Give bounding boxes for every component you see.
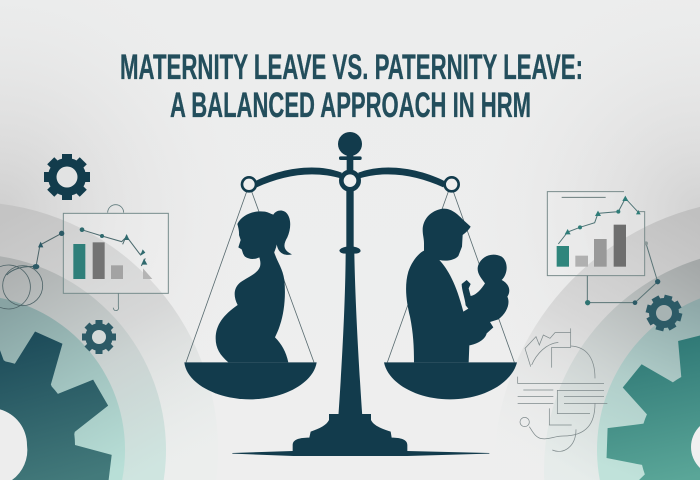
left chart panel — [0, 205, 168, 311]
left concentric circles — [0, 204, 218, 480]
beam rings — [242, 172, 459, 191]
base — [232, 414, 489, 456]
scale strings — [186, 192, 514, 362]
chart frame — [547, 192, 645, 276]
trend line — [80, 227, 147, 266]
hanger loop — [108, 205, 124, 311]
network connector — [7, 231, 64, 275]
right chart panel — [518, 192, 660, 451]
father holding baby silhouette — [406, 209, 509, 362]
small gear top left — [44, 154, 90, 200]
title — [120, 48, 583, 125]
overlapping circles — [0, 265, 43, 309]
bars — [557, 225, 626, 267]
small gear right — [646, 295, 682, 331]
large gear bottom right — [606, 336, 700, 480]
central column — [338, 187, 362, 417]
balance scale — [184, 132, 517, 456]
chart frame — [63, 213, 168, 293]
line-art diagram — [518, 328, 607, 451]
right pan — [384, 362, 517, 399]
trend line — [558, 196, 641, 244]
beam — [255, 168, 445, 187]
small gear lower left — [82, 320, 116, 354]
right concentric circles — [494, 207, 700, 480]
left pan — [184, 362, 317, 399]
pregnant woman silhouette — [216, 211, 292, 362]
bars — [73, 242, 152, 279]
header line — [562, 196, 606, 199]
large gear bottom left — [0, 332, 112, 480]
network connector — [585, 241, 660, 305]
top finial — [338, 132, 362, 173]
